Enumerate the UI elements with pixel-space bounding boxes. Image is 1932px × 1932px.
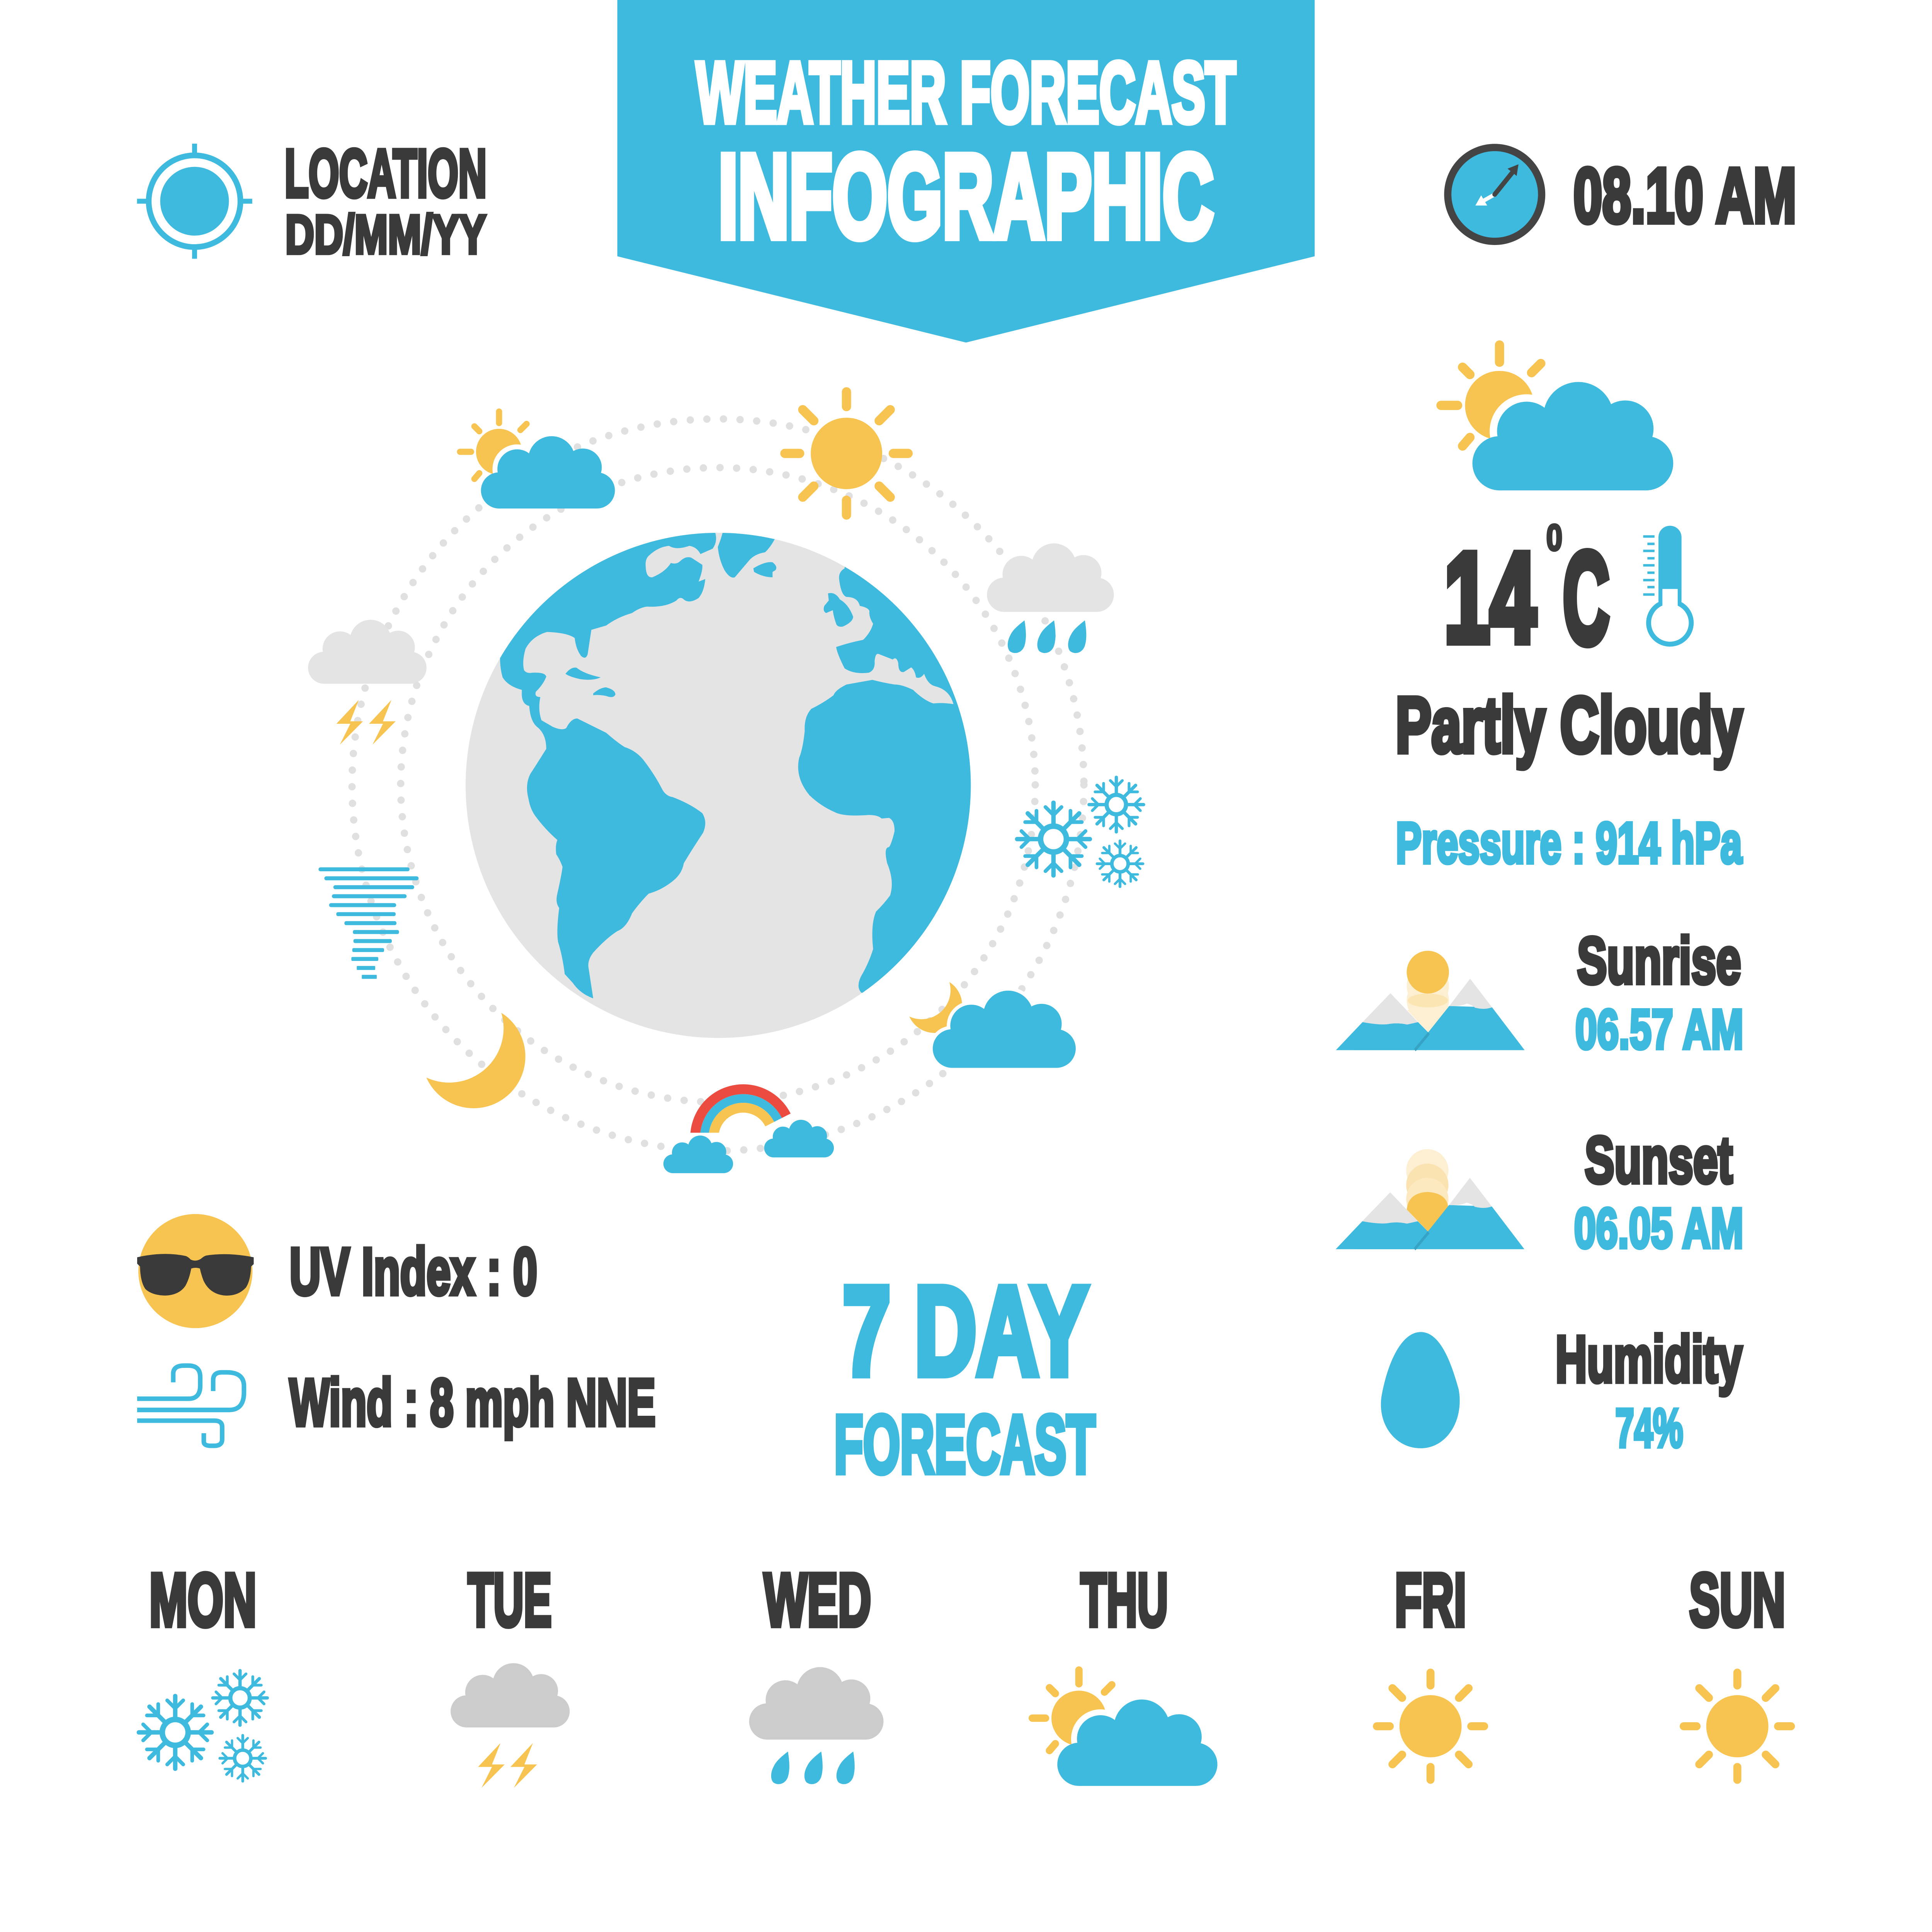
day: monday [139, 1558, 267, 1781]
humidity value: 74% [1615, 1398, 1683, 1459]
condition label: Partly Cloudy [1396, 681, 1743, 769]
icon: humidity drop [1381, 1332, 1460, 1448]
pressure label: Pressure : 914 hPa [1396, 810, 1742, 875]
current conditions panel: C [1563, 526, 1609, 671]
globe [466, 533, 971, 1038]
forecast subheading: FORECAST [834, 1399, 1095, 1491]
icon: sunrise mountains [1336, 951, 1525, 1050]
inner dotted orbit [401, 468, 1035, 1102]
uv and wind block [137, 1214, 655, 1446]
day: thursday: THU [1081, 1558, 1168, 1642]
sunrise time: 06.57 AM [1575, 998, 1743, 1061]
icon: sunset mountains [1336, 1149, 1524, 1249]
seven day heading [834, 1261, 1095, 1491]
icon: partly cloudy large [1441, 345, 1673, 490]
humidity label: Humidity [1556, 1323, 1742, 1396]
title line 1: WEATHER FORECAST [696, 44, 1236, 141]
temperature: 14 [1444, 526, 1536, 668]
icon: crescent moon on ring [426, 1013, 526, 1108]
sunset time: 06.05 AM [1574, 1197, 1743, 1260]
temperature: 0 [1546, 517, 1562, 558]
time label: 08.10 AM [1573, 152, 1796, 239]
earth weather ring [308, 392, 1144, 1185]
title line 2: INFOGRAPHIC [718, 130, 1214, 263]
day: tuesday [451, 1558, 570, 1788]
seven day heading: 7 DAY [843, 1261, 1088, 1401]
icon: sun with sunglasses [137, 1214, 254, 1328]
time block [1448, 148, 1796, 242]
header banner [617, 0, 1315, 342]
day: wednesday [749, 1558, 884, 1784]
sunrise label: Sunrise [1577, 924, 1741, 998]
day: thursday [1032, 1558, 1218, 1786]
day: monday: MON [149, 1558, 257, 1642]
current conditions panel [1336, 345, 1743, 1459]
icon: lightning cloud on ring [308, 620, 427, 745]
daily forecast row [139, 1558, 1791, 1788]
day: tuesday: TUE [468, 1558, 552, 1642]
date label: DD/MM/YY [285, 204, 486, 265]
icon: rain cloud on ring [987, 543, 1114, 653]
location block [137, 136, 487, 265]
icon: rainbow with clouds [663, 1089, 834, 1185]
sunset label: Sunset [1585, 1124, 1733, 1197]
day: sunday [1684, 1558, 1791, 1780]
uv index label: UV Index : 0 [289, 1235, 537, 1309]
day: friday: FRI [1395, 1558, 1466, 1642]
icon: wind [137, 1366, 244, 1446]
icon: tornado [318, 867, 418, 979]
icon: snowflakes on ring [1017, 777, 1144, 887]
day: friday [1377, 1558, 1484, 1780]
day: wednesday: WED [764, 1558, 871, 1642]
outer dotted orbit [352, 419, 1084, 1151]
icon: moon with cloud on ring [909, 982, 1076, 1068]
icon: partly cloudy on ring [460, 412, 615, 509]
day: sunday: SUN [1689, 1558, 1786, 1642]
icon: clock [1448, 148, 1542, 242]
icon: thermometer [1643, 526, 1694, 646]
icon: sun on ring [785, 392, 908, 515]
icon: location target [137, 144, 252, 259]
location label: LOCATION [285, 136, 487, 211]
wind label: Wind : 8 mph NNE [289, 1366, 655, 1440]
